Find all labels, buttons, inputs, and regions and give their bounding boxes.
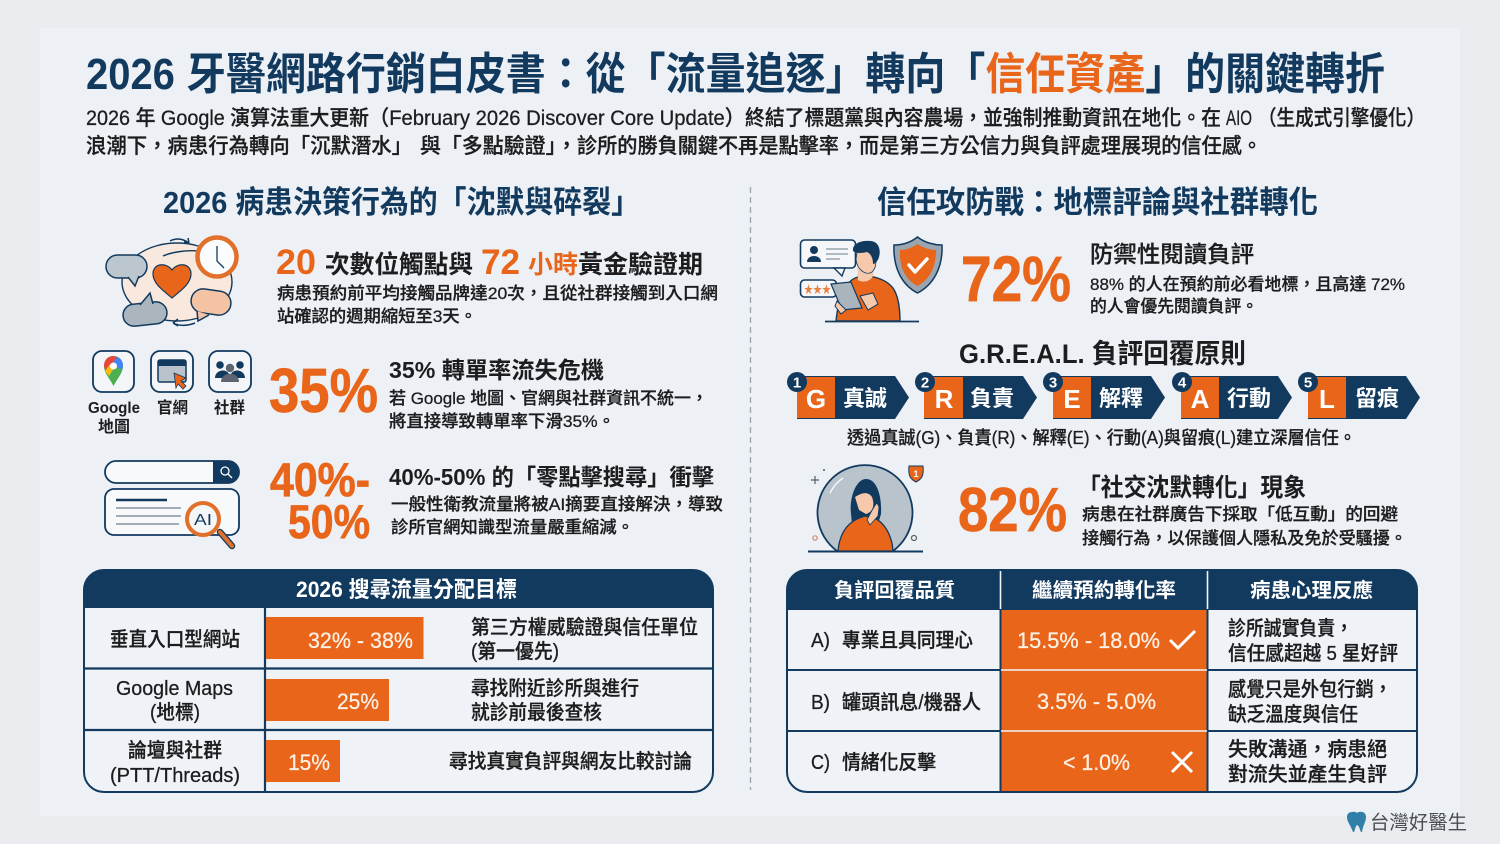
chip: L: 5 (1304, 374, 1312, 392)
row: google maps: (地標) (150, 701, 200, 724)
icon: AI search (105, 461, 239, 546)
text: defensive review reading (1090, 241, 1405, 316)
icon labels: 社群 (214, 398, 245, 417)
row A (811, 617, 1398, 665)
row: vertical portals: (第一優先) (471, 640, 559, 663)
chip: L: 留痕 (1355, 386, 1399, 411)
intro text: AIO (1226, 107, 1252, 130)
icon: community people (209, 351, 251, 392)
icon labels: 地圖 (98, 418, 130, 436)
table header: 病患心理反應 (1250, 578, 1373, 602)
chip: R: R (935, 384, 954, 414)
row C: < 1.0% (1063, 750, 1130, 775)
row: vertical portals: 第三方權威驗證與信任單位 (471, 615, 698, 639)
stat: 20 touchpoints 72 hours heading: 72 (481, 243, 520, 282)
row C: 失敗溝通，病患絕 (1228, 738, 1387, 761)
icon: website window (151, 351, 193, 392)
stat: 20 touchpoints 72 hours heading: 次數位觸點與 (325, 250, 473, 279)
icon: google maps (93, 351, 134, 392)
icon labels: 官網 (157, 398, 188, 417)
row: forums and social: 15% (288, 750, 330, 775)
text: social silent conversion: 接觸行為，以保護個人隱私及免於受騷擾。 (1082, 529, 1407, 548)
stat: 40%-50% (270, 453, 370, 548)
intro text: （February 2026 Discover Core Update） (369, 107, 745, 130)
table header: 2026 搜尋流量分配目標 (296, 577, 517, 602)
row: google maps (116, 677, 639, 724)
intro text: 與「多點驗證」， (420, 135, 577, 158)
text: defensive review reading: 防禦性閱讀負評 (1090, 241, 1254, 267)
stat: 40%-50%: 50% (288, 495, 370, 548)
text: zero click description (389, 464, 723, 537)
text: 35% description (389, 357, 708, 431)
icon: man reading reviews with shield: ★★★ (804, 284, 831, 296)
text: defensive review reading: 88% 的人在預約前必看地標，且高達 72% (1090, 275, 1405, 294)
chip: R: 負責 (970, 386, 1014, 411)
intro text (86, 107, 1425, 158)
row: forums and social: 尋找真實負評與網友比較討論 (449, 750, 692, 773)
chip: E: 解釋 (1099, 386, 1143, 411)
intro text: 2026 年 Google 演算法重大更新 (86, 107, 369, 130)
stat: 72%: 72% (961, 243, 1071, 315)
row: vertical portals: 32% - 38% (308, 628, 413, 653)
row A: 診所誠實負責， (1228, 617, 1353, 640)
text: 35% description: 將直接導致轉單率下滑35%。 (389, 411, 615, 431)
text: 35% description: 若 Google 地圖、官網與社群資訊不統一， (389, 388, 708, 408)
text: zero click description: 診所官網知識型流量嚴重縮減。 (391, 518, 634, 537)
icon: AI search: AI (194, 512, 212, 529)
row C: 對流失並產生負評 (1228, 763, 1387, 786)
heading: GREAL principle: G.R.E.A.L. 負評回覆原則 (959, 339, 1246, 369)
chip: R (915, 372, 1037, 419)
chip: E (1043, 372, 1165, 419)
icon: woman in silent bubble (808, 465, 923, 552)
row B: 感覺只是外包行銷， (1228, 678, 1392, 701)
stat: 35%: 35% (269, 357, 378, 426)
table: negative review reply quality (787, 570, 1417, 792)
row A: A) (811, 630, 830, 652)
row B (811, 678, 1392, 726)
icon labels (88, 398, 245, 436)
row B: 3.5% - 5.0% (1037, 689, 1156, 714)
row A: 信任感超越 5 星好評 (1228, 642, 1398, 665)
chip: A: A (1191, 384, 1210, 414)
row B: 罐頭訊息/機器人 (842, 691, 981, 714)
text: GREAL caption: 透過真誠(G)、負責(R)、解釋(E)、行動(A)與留痕(L)建立深層信任。 (847, 428, 1356, 448)
stat: 20 touchpoints 72 hours heading (276, 243, 703, 282)
left heading: 2026 病患決策行為的「沈默與碎裂」 (163, 185, 640, 220)
row A: 15.5% - 18.0% (1017, 628, 1160, 653)
table header: 負評回覆品質 (834, 578, 955, 602)
row: google maps: 尋找附近診所與進行 (471, 677, 639, 700)
text: touchpoints body: 病患預約前平均接觸品牌達20次，且從社群接觸到入口網 (277, 284, 718, 303)
row C: 情緒化反擊 (842, 751, 936, 774)
chip: L: L (1319, 384, 1335, 414)
icon: man reading reviews with shield (800, 237, 942, 322)
stat: 82%: 82% (958, 476, 1067, 545)
row A: 專業且具同理心 (842, 629, 973, 652)
intro text: 診所的勝負關鍵不再是點擊率，而是第三方公信力與負評處理展現的信任感。 (577, 135, 1262, 158)
row: forums and social: 論壇與社群 (128, 738, 222, 762)
text: touchpoints body: 站確認的週期縮短至3天。 (277, 307, 477, 326)
text: social silent conversion (1078, 474, 1407, 548)
stat: 20 touchpoints 72 hours heading: 黃金驗證期 (578, 251, 703, 279)
row C: C) (811, 752, 830, 774)
row C (811, 738, 1387, 786)
text: social silent conversion: 病患在社群廣告下採取「低互動」的回避 (1082, 505, 1398, 524)
row: google maps: 25% (337, 689, 379, 714)
row B: B) (811, 692, 830, 714)
chip: A (1172, 372, 1292, 419)
row: vertical portals (110, 615, 698, 663)
chip: E: E (1063, 384, 1081, 414)
chip: G: 1 (793, 374, 801, 392)
chip: A: 行動 (1227, 386, 1271, 411)
text: touchpoints body (277, 284, 718, 326)
table: search traffic allocation (84, 570, 713, 792)
chip: R: 2 (921, 374, 929, 392)
chip: G (787, 372, 909, 419)
row: google maps: 就診前最後查核 (471, 701, 602, 724)
row B: 缺乏溫度與信任 (1228, 703, 1358, 726)
chip: G: G (806, 384, 826, 414)
text: defensive review reading: 的人會優先閱讀負評。 (1090, 297, 1258, 316)
chip: G: 真誠 (843, 386, 887, 411)
chip: E: 3 (1049, 374, 1057, 392)
text: social silent conversion: 「社交沈默轉化」現象 (1078, 474, 1306, 502)
intro text: 浪潮下，病患行為轉向「沉默潛水」 (86, 135, 412, 158)
text: zero click description: 40%-50% 的「零點擊搜尋」衝擊 (389, 464, 714, 490)
text: 35% description: 35% 轉單率流失危機 (389, 357, 604, 383)
table header: 繼續預約轉化率 (1032, 579, 1176, 602)
row: google maps: Google Maps (116, 678, 233, 700)
stat: 20 touchpoints 72 hours heading: 20 (276, 243, 316, 282)
chip: L (1298, 372, 1420, 419)
row: forums and social (110, 738, 692, 787)
intro text: 終結了標題黨與內容農場，並強制推動資訊在地化。在 (745, 107, 1221, 130)
stat: 20 touchpoints 72 hours heading: 小時 (528, 251, 578, 279)
row: forums and social: (PTT/Threads) (110, 765, 240, 787)
logo: tooth and brand: 台灣好醫生 (1370, 812, 1467, 834)
chip: A: 4 (1178, 374, 1187, 392)
stat: 40%-50%: 40%- (270, 453, 370, 506)
title: 2026 牙醫網路行銷白皮書：從「流量追逐」轉向「信任資產」的關鍵轉折 (86, 50, 1385, 99)
row: vertical portals: 垂直入口型網站 (110, 628, 240, 651)
table header (834, 578, 1373, 602)
intro text: （生成式引擎優化） (1258, 107, 1425, 130)
right heading: 信任攻防戰：地標評論與社群轉化 (877, 185, 1318, 220)
text: zero click description: 一般性衛教流量將被AI摘要直接解決，導致 (391, 495, 723, 514)
icon: woman in silent bubble: 1 (913, 469, 919, 479)
icon labels: Google (88, 400, 140, 417)
icon: patient journey bubbles and clock (106, 238, 236, 327)
